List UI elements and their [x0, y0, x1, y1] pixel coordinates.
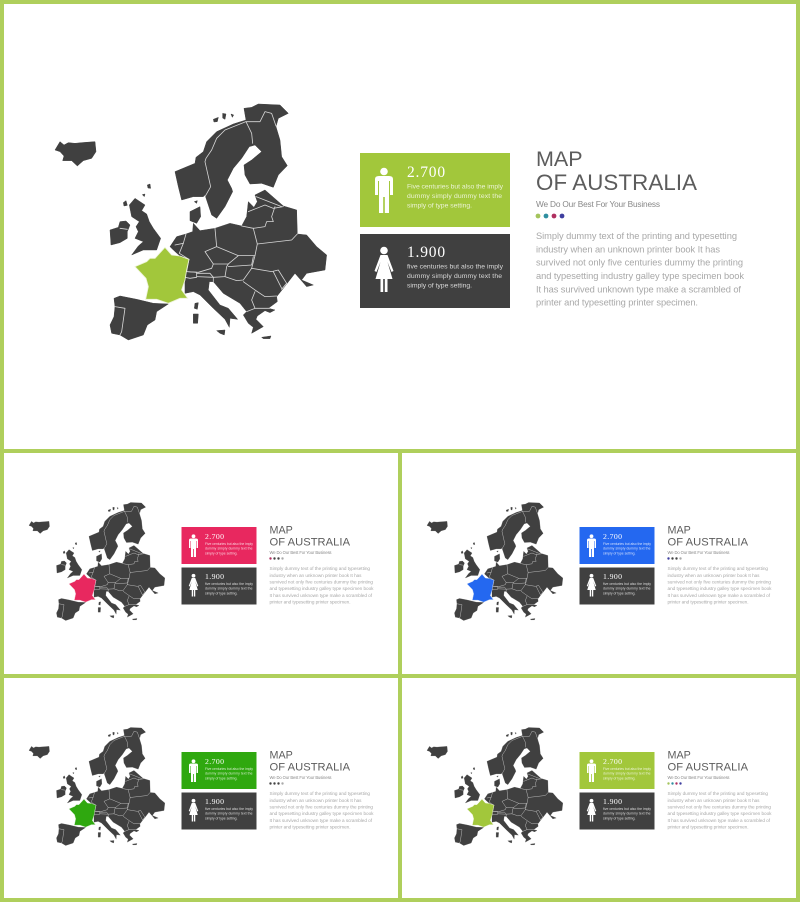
body text: survived not only five centuries dummy the printing [668, 579, 771, 584]
stat card: male 2.700: 2.700 [603, 757, 622, 766]
stat card: female 1.900 [360, 234, 510, 308]
stat card: female 1.900: dummy simply dummy text the [407, 273, 502, 280]
title: OF AUSTRALIA [270, 762, 351, 774]
colour dots [667, 782, 682, 785]
body text: It has survived unknown type make a scrambled of [536, 284, 741, 294]
stat card: female 1.900: five centuries but also the imply [205, 807, 253, 811]
body text: It has survived unknown type make a scrambled of [668, 593, 771, 598]
stat card: female 1.900: simply of type setting. [407, 282, 472, 290]
body text: industry when an unknown printer book It has [270, 573, 362, 578]
panel: green variant [2, 676, 400, 900]
colour dots [269, 782, 284, 785]
body text: printer and typesetting printer specimen. [668, 599, 748, 604]
body text [668, 791, 772, 829]
map of Europe with France highlighted [29, 502, 165, 620]
stat card: female 1.900 [182, 792, 256, 830]
stat card: male 2.700 [182, 752, 256, 789]
body text: Simply dummy text of the printing and typesetting [668, 566, 768, 571]
stat card: male 2.700: dummy simply dummy text the [603, 772, 651, 776]
stat card: female 1.900 [580, 792, 654, 830]
stat card: female 1.900: five centuries but also the imply [603, 582, 651, 586]
map of Europe with France highlighted [55, 104, 327, 340]
title: MAP [270, 750, 293, 762]
stat card: female 1.900: 1.900 [407, 244, 446, 261]
stat card: female 1.900: dummy simply dummy text the [205, 812, 253, 816]
body text: It has survived unknown type make a scrambled of [270, 593, 373, 598]
stat card: male 2.700: 2.700 [407, 164, 446, 181]
tagline: We Do Our Best For Your Business [536, 199, 660, 209]
stat card: male 2.700: Five centuries but also the imply [205, 767, 253, 771]
stat card: male 2.700: simply of type setting. [205, 551, 238, 555]
tagline: We Do Our Best For Your Business [270, 775, 332, 780]
stat card: female 1.900 [182, 568, 256, 604]
stat card: female 1.900: simply of type setting. [205, 816, 238, 820]
title: MAP [536, 147, 583, 171]
stat card: male 2.700: Five centuries but also the imply [603, 767, 651, 771]
body text: industry when an unknown printer book It has [536, 244, 720, 254]
body text: It has survived unknown type make a scrambled of [270, 818, 373, 823]
body text: printer and typesetting printer specimen. [270, 824, 350, 829]
body text: survived not only five centuries dummy the printing [270, 804, 373, 809]
stat card: male 2.700: Five centuries but also the imply [205, 542, 253, 546]
tagline: We Do Our Best For Your Business [668, 775, 730, 780]
stat card: female 1.900: dummy simply dummy text the [603, 812, 651, 816]
body text [668, 566, 772, 604]
stat card: male 2.700 [182, 527, 256, 564]
body text: and typesetting industry galley type specimen book [270, 811, 374, 816]
colour dots [269, 557, 284, 560]
body text: industry when an unknown printer book It has [668, 798, 760, 803]
stat card: female 1.900 [580, 568, 654, 604]
body text: and typesetting industry galley type specimen book [536, 271, 744, 281]
title: OF AUSTRALIA [270, 536, 351, 548]
body text: industry when an unknown printer book It has [270, 798, 362, 803]
stat card: female 1.900: five centuries but also the imply [603, 807, 651, 811]
panel frame [2, 676, 400, 900]
stat card: male 2.700 [580, 752, 654, 789]
title: OF AUSTRALIA [668, 536, 749, 548]
stat card: male 2.700 [360, 153, 510, 227]
stat card: female 1.900: five centuries but also the imply [205, 582, 253, 586]
body text: It has survived unknown type make a scrambled of [668, 818, 771, 823]
stat card: female 1.900: 1.900 [205, 572, 224, 581]
stat card: female 1.900: 1.900 [603, 797, 622, 806]
panel frame [2, 2, 798, 451]
panel frame [400, 676, 798, 900]
stat card: male 2.700: Five centuries but also the imply [603, 542, 651, 546]
stat card: male 2.700: simply of type setting. [407, 202, 472, 210]
tagline: We Do Our Best For Your Business [270, 550, 332, 555]
title: MAP [668, 750, 691, 762]
panel: main slide [2, 2, 798, 451]
colour dots [667, 557, 682, 560]
map of Europe with France highlighted [427, 727, 563, 845]
stat card: male 2.700: 2.700 [603, 532, 622, 541]
stat card: female 1.900: dummy simply dummy text the [205, 586, 253, 590]
colour dots [536, 214, 564, 218]
title: OF AUSTRALIA [668, 762, 749, 774]
stat card: female 1.900: simply of type setting. [603, 591, 636, 595]
map of Europe with France highlighted [29, 727, 165, 845]
body text: Simply dummy text of the printing and typesetting [270, 566, 370, 571]
stat card: male 2.700: dummy simply dummy text the [407, 193, 502, 200]
stat card: female 1.900: simply of type setting. [603, 816, 636, 820]
stat card: male 2.700: dummy simply dummy text the [205, 772, 253, 776]
stat card: male 2.700: 2.700 [205, 532, 224, 541]
body text: printer and typesetting printer specimen. [668, 824, 748, 829]
body text: and typesetting industry galley type specimen book [668, 811, 772, 816]
body text: survived not only five centuries dummy the printing [536, 258, 743, 268]
stat card: male 2.700: simply of type setting. [205, 776, 238, 780]
panel: pink variant [2, 451, 400, 676]
body text: industry when an unknown printer book It has [668, 573, 760, 578]
stat card: male 2.700: simply of type setting. [603, 551, 636, 555]
panel frame [400, 451, 798, 676]
title: MAP [270, 524, 293, 536]
body text: and typesetting industry galley type specimen book [668, 586, 772, 591]
stat card: female 1.900: five centuries but also the imply [407, 264, 504, 270]
body text: printer and typesetting printer specimen. [536, 298, 698, 308]
body text: Simply dummy text of the printing and typesetting [668, 791, 768, 796]
panel: blue variant [400, 451, 798, 676]
stat card: female 1.900: simply of type setting. [205, 591, 238, 595]
stat card: male 2.700: dummy simply dummy text the [205, 546, 253, 550]
stat card: female 1.900: 1.900 [603, 572, 622, 581]
stat card: male 2.700: 2.700 [205, 757, 224, 766]
body text: survived not only five centuries dummy the printing [270, 579, 373, 584]
panel: lime variant [400, 676, 798, 900]
body text: printer and typesetting printer specimen. [270, 599, 350, 604]
body text [536, 231, 744, 308]
stat card: male 2.700: Five centuries but also the imply [407, 184, 504, 190]
body text: Simply dummy text of the printing and typesetting [536, 231, 737, 241]
body text [270, 791, 374, 829]
body text: survived not only five centuries dummy the printing [668, 804, 771, 809]
stat card: female 1.900: dummy simply dummy text the [603, 586, 651, 590]
tagline: We Do Our Best For Your Business [668, 550, 730, 555]
stat card: female 1.900: 1.900 [205, 797, 224, 806]
stat card: male 2.700: dummy simply dummy text the [603, 546, 651, 550]
body text [270, 566, 374, 604]
stat card: male 2.700 [580, 527, 654, 564]
map of Europe with France highlighted [427, 502, 563, 620]
body text: Simply dummy text of the printing and typesetting [270, 791, 370, 796]
title: OF AUSTRALIA [536, 170, 697, 195]
panel frame [2, 451, 400, 676]
title: MAP [668, 524, 691, 536]
body text: and typesetting industry galley type specimen book [270, 586, 374, 591]
stat card: male 2.700: simply of type setting. [603, 776, 636, 780]
